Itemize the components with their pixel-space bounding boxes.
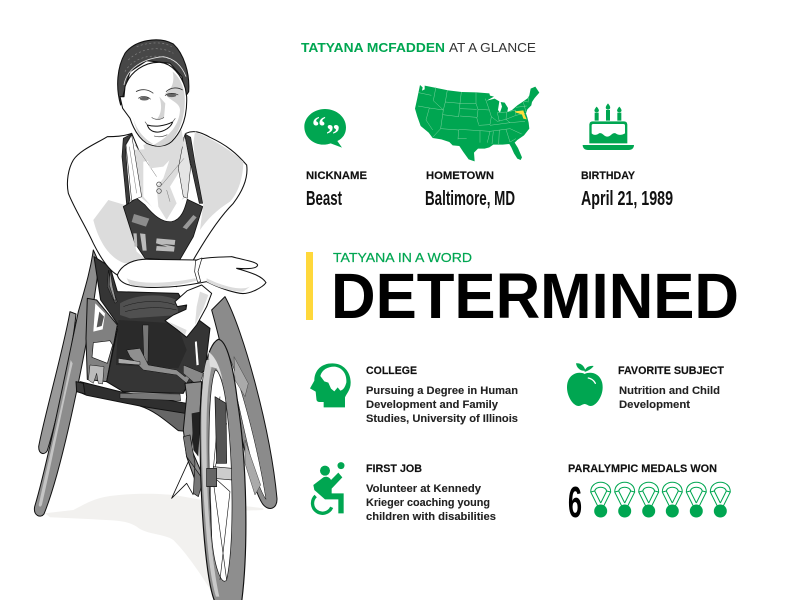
- college text: COLLEGE: [366, 365, 417, 377]
- map: United States: [415, 85, 539, 161]
- first job text: children with disabilities: [366, 511, 496, 523]
- college text: [366, 365, 518, 425]
- icon: birthday cake: [583, 103, 634, 150]
- first job text: [366, 463, 496, 523]
- far left wheel: [39, 312, 76, 454]
- college text: Development and Family: [366, 399, 499, 411]
- headband: [124, 57, 186, 85]
- nickname block: Beast: [306, 188, 342, 210]
- rear right wheel: [212, 297, 277, 508]
- seat: [94, 257, 210, 393]
- hometown block: [425, 170, 515, 210]
- icon: apple: [567, 363, 603, 406]
- heading: at a glance: TATYANA MCFADDEN: [301, 40, 445, 55]
- torso and shoulders: [67, 132, 247, 287]
- icon: speech bubble: “: [312, 112, 326, 143]
- favorite subject text: Nutrition and Child: [619, 385, 720, 397]
- frame side: [86, 298, 117, 382]
- college text: Pursuing a Degree in Human: [366, 385, 518, 397]
- front fork: [183, 382, 203, 480]
- first job text: Volunteer at Kennedy: [366, 483, 482, 495]
- favorite subject text: Development: [619, 399, 690, 411]
- smile: [147, 122, 173, 132]
- birthday block: BIRTHDAY: [581, 170, 636, 182]
- first job text: Krieger coaching young: [366, 497, 490, 509]
- favorite subject text: FAVORITE SUBJECT: [618, 365, 724, 377]
- illustration: athlete in racing wheelchair: [34, 40, 277, 600]
- lower hand: [165, 285, 212, 337]
- birthday block: April 21, 1989: [581, 188, 673, 210]
- eyes and brows: [136, 88, 183, 93]
- jersey: [123, 198, 203, 261]
- hometown block: HOMETOWN: [426, 170, 494, 182]
- medals: [591, 482, 730, 518]
- hair: [118, 40, 189, 105]
- nickname block: [306, 170, 367, 210]
- nickname block: NICKNAME: [306, 170, 367, 182]
- seat straps: [127, 348, 193, 383]
- jersey straps: [122, 134, 132, 205]
- heading: at a glance: [301, 40, 536, 55]
- accent bar: [306, 252, 313, 320]
- icon: speech bubble: ”: [326, 120, 340, 151]
- state borders: [418, 87, 529, 144]
- college text: Studies, University of Illinois: [366, 413, 518, 425]
- word headline: TATYANA IN A WORD: [333, 250, 472, 265]
- icon: speech bubble: [304, 109, 346, 151]
- medals heading: PARALYMPIC MEDALS WON: [568, 463, 717, 475]
- athlete body: [67, 40, 266, 294]
- medal count: 6: [568, 478, 582, 527]
- wheelchair: [34, 250, 277, 600]
- shadow on floor: [45, 494, 263, 600]
- near left wheel: [34, 250, 99, 516]
- face: [120, 62, 187, 146]
- front wheel: [200, 339, 246, 600]
- icon: head with brain: [310, 363, 351, 407]
- birthday block: [581, 170, 673, 210]
- heading: at a glance: AT A GLANCE: [449, 40, 536, 55]
- icon: wheelchair athlete: [313, 462, 344, 513]
- grey skin shading: [193, 132, 243, 230]
- first job text: FIRST JOB: [366, 463, 422, 475]
- necklace pendant: [157, 182, 161, 193]
- hometown block: Baltimore, MD: [425, 188, 515, 210]
- neck: [133, 120, 184, 157]
- under-seat frame: [140, 402, 189, 432]
- favorite subject text: [618, 365, 724, 411]
- highlight: Maryland: [515, 110, 527, 119]
- word headline: DETERMINED: [331, 260, 739, 332]
- arm and upper hand: [117, 257, 266, 294]
